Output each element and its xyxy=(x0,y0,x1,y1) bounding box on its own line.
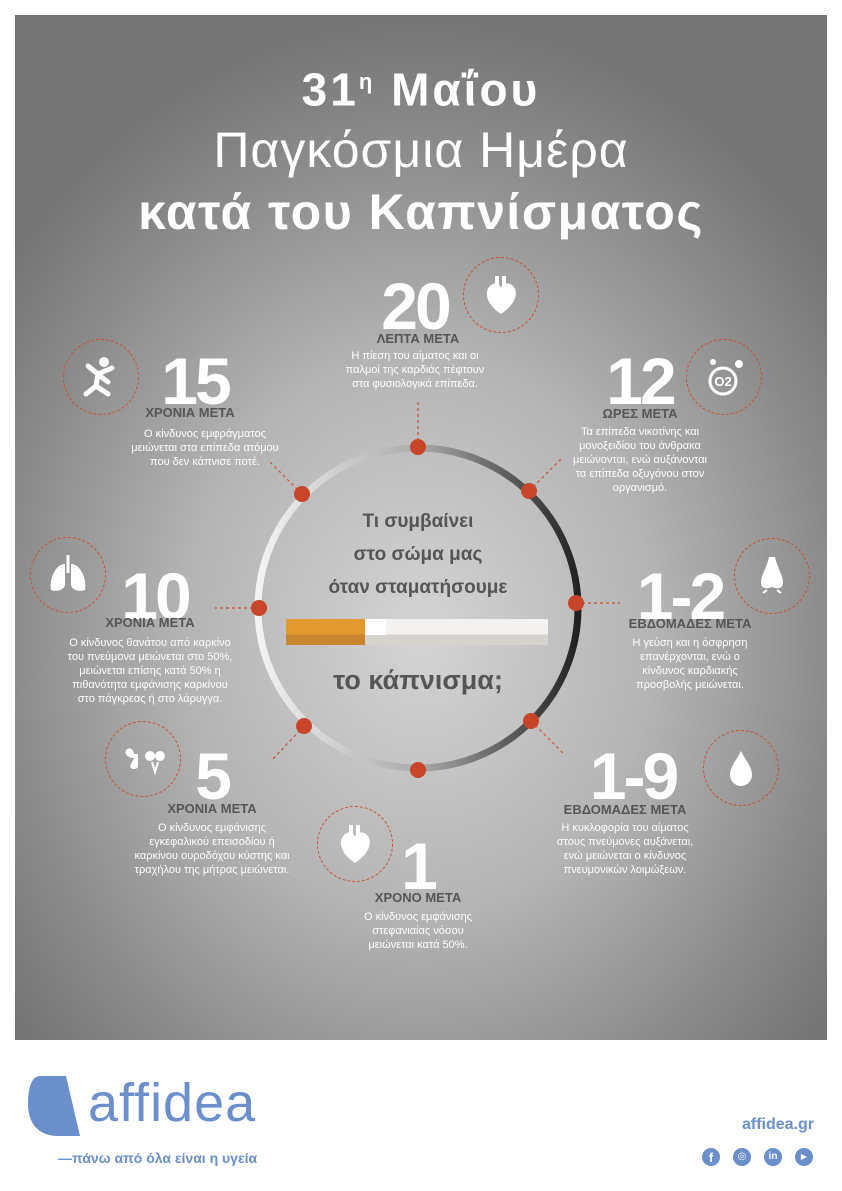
item: 1 year: 1 xyxy=(401,829,435,903)
item: 1-9 weeks: ΕΒΔΟΜΑΔΕΣ ΜΕΤΑ xyxy=(564,802,686,817)
item: 15 years xyxy=(131,344,279,468)
icon: heart 1 xyxy=(317,806,393,882)
item: 1-2 weeks xyxy=(629,559,751,691)
item: 5 years: εγκεφαλικού επεισοδίου ή xyxy=(149,836,275,848)
social icons: ▶ xyxy=(801,1152,807,1161)
item: 10 years: στο πάγκρεας ή στο λάρυγγα. xyxy=(78,693,222,705)
item: 12 hours: τα επίπεδα οξυγόνου στον xyxy=(576,468,704,480)
item: 1-9 weeks: Η κυκλοφορία του αίματος xyxy=(561,822,689,834)
item: 1-2 weeks: ΕΒΔΟΜΑΔΕΣ ΜΕΤΑ xyxy=(629,616,751,631)
icon: O2 xyxy=(686,339,762,415)
icon: O2: O2 xyxy=(714,374,732,389)
item: 10 years: 10 xyxy=(121,559,189,633)
item: 10 years xyxy=(68,559,232,705)
logo: affidea: affidea xyxy=(88,1073,256,1133)
cigarette xyxy=(286,619,548,645)
item: 20 minutes: στα φυσιολογικά επίπεδα. xyxy=(352,378,478,390)
item: 12 hours xyxy=(573,344,707,494)
center question end: το κάπνισμα; xyxy=(333,665,503,695)
item: 1-2 weeks: κίνδυνος καρδιακής xyxy=(642,665,738,677)
item: 15 years: ΧΡΟΝΙΑ ΜΕΤΑ xyxy=(145,405,235,420)
tagline: —πάνω από όλα είναι η υγεία xyxy=(58,1150,257,1166)
icon: heart 20 xyxy=(463,257,539,333)
item: 1 year: ΧΡΟΝΟ ΜΕΤΑ xyxy=(375,890,461,905)
title xyxy=(138,63,704,240)
item: 5 years: ΧΡΟΝΙΑ ΜΕΤΑ xyxy=(167,801,257,816)
item: 15 years: μειώνεται στα επίπεδα ατόμου xyxy=(131,442,279,454)
social icons: f xyxy=(709,1150,713,1165)
icon: nose xyxy=(734,538,810,614)
item: 1 year: στεφανιαίας νόσου xyxy=(372,925,464,937)
item: 12 hours: μειώνονται, ενώ αυξάνονται xyxy=(573,454,707,466)
item: 12 hours: μονοξειδίου του άνθρακα xyxy=(579,440,701,452)
website: affidea.gr xyxy=(742,1116,814,1133)
title: κατά του Καπνίσματος xyxy=(138,184,704,240)
item: 1-2 weeks: Η γεύση και η όσφρηση xyxy=(632,637,748,649)
item: 20 minutes: ΛΕΠΤΑ ΜΕΤΑ xyxy=(377,331,459,346)
item: 5 years: καρκίνου ουροδόχου κύστης και xyxy=(134,850,290,862)
item: 10 years: μειώνεται επίσης κατά 50% η xyxy=(79,665,221,677)
item: 12 hours: οργανισμό. xyxy=(613,482,667,494)
icon: lungs xyxy=(30,537,106,613)
item: 1-9 weeks: στους πνεύμονες αυξάνεται, xyxy=(557,836,693,848)
social icons: in xyxy=(769,1151,777,1162)
item: 1-9 weeks: πνευμονικών λοιμώξεων. xyxy=(564,864,686,876)
item: 10 years: πιθανότητα εμφάνισης καρκίνου xyxy=(72,679,228,691)
item: 1-2 weeks: επανέρχονται, ενώ ο xyxy=(640,651,740,663)
icon: organs xyxy=(105,721,181,797)
center question: Τι συμβαίνει xyxy=(363,511,473,532)
item: 1-2 weeks: προσβολής μειώνεται. xyxy=(636,679,744,691)
item: 20 minutes: 20 xyxy=(381,269,449,343)
center question: όταν σταματήσουμε xyxy=(329,577,507,598)
item: 5 years xyxy=(134,739,290,876)
item: 1 year: Ο κίνδυνος εμφάνισης xyxy=(364,911,472,923)
item: 1-9 weeks: ενώ μειώνεται ο κίνδυνος xyxy=(564,850,686,862)
item: 5 years: 5 xyxy=(195,739,229,813)
item: 5 years: Ο κίνδυνος εμφάνισης xyxy=(158,822,266,834)
title: 31η Μαΐου xyxy=(302,63,540,115)
center question xyxy=(329,511,507,598)
social icons: ◎ xyxy=(738,1151,746,1162)
item: 1-9 weeks xyxy=(557,739,693,876)
item: 12 hours: 12 xyxy=(606,344,674,418)
item: 10 years: του πνεύμονα μειώνεται στο 50%, xyxy=(68,651,232,663)
social icons xyxy=(702,1148,813,1166)
item: 1 year xyxy=(364,829,472,951)
item: 15 years: 15 xyxy=(161,344,229,418)
item: 12 hours: Τα επίπεδα νικοτίνης και xyxy=(581,426,699,438)
item: 20 minutes: Η πίεση του αίματος και οι xyxy=(351,350,479,362)
item: 10 years: ΧΡΟΝΙΑ ΜΕΤΑ xyxy=(105,615,195,630)
center question: στο σώμα μας xyxy=(354,544,482,565)
item: 20 minutes xyxy=(346,269,484,390)
title: Παγκόσμια Ημέρα xyxy=(213,122,629,178)
item: 1-9 weeks: 1-9 xyxy=(590,739,676,813)
item: 12 hours: ΩΡΕΣ ΜΕΤΑ xyxy=(602,406,678,421)
item: 1-2 weeks: 1-2 xyxy=(637,559,723,633)
icon: drop xyxy=(703,730,779,806)
item: 15 years: που δεν κάπνισε ποτέ. xyxy=(150,456,260,468)
item: 15 years: Ο κίνδυνος εμφράγματος xyxy=(144,428,266,440)
icon: runner xyxy=(63,339,139,415)
item: 10 years: Ο κίνδυνος θανάτου από καρκίνο xyxy=(69,637,231,649)
item: 5 years: τραχήλου της μήτρας μειώνεται. xyxy=(135,864,289,876)
item: 1 year: μειώνεται κατά 50%. xyxy=(368,939,468,951)
item: 20 minutes: παλμοί της καρδιάς πέφτουν xyxy=(346,364,484,376)
